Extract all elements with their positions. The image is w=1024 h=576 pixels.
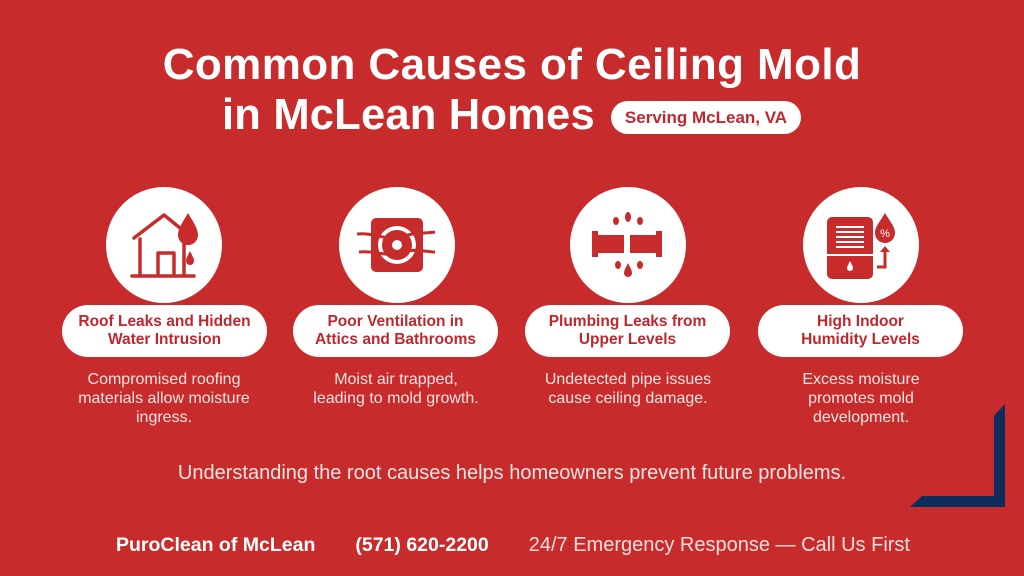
icon: house with water drop (106, 187, 222, 303)
label: plumbing leaks: Upper Levels (579, 331, 676, 348)
title line 2: in McLean Homes (222, 91, 595, 139)
text: plumbing desc (545, 371, 711, 407)
icon: burst pipe (570, 187, 686, 303)
label: roof leaks (62, 305, 267, 357)
label: humidity: High Indoor (817, 313, 904, 330)
label: roof leaks: Roof Leaks and Hidden (78, 313, 251, 330)
label: poor ventilation: Attics and Bathrooms (315, 331, 476, 348)
text: ventilation desc: leading to mold growth. (313, 390, 479, 407)
text: ventilation desc (313, 371, 479, 407)
label: humidity: Humidity Levels (801, 331, 920, 348)
text: humidity desc: promotes mold (808, 390, 914, 407)
text: humidity desc (802, 371, 920, 426)
text: roof desc: Compromised roofing (88, 371, 240, 388)
icon: ventilation fan (339, 187, 455, 303)
label: plumbing leaks (525, 305, 730, 357)
footer: PuroClean of McLean (571) 620-2200 24/7 Emergency Response — Call Us First (116, 534, 910, 556)
icon: dehumidifier: % (880, 228, 890, 240)
icon: dehumidifier (803, 187, 919, 303)
label: plumbing leaks: Plumbing Leaks from (549, 313, 706, 330)
title line 1: Common Causes of Ceiling Mold (163, 40, 861, 89)
text: humidity desc: Excess moisture (802, 371, 920, 388)
text: plumbing desc: cause ceiling damage. (548, 390, 708, 407)
text: humidity desc: development. (813, 409, 909, 426)
text: plumbing desc: Undetected pipe issues (545, 371, 711, 388)
text: roof desc: ingress. (136, 409, 192, 426)
text: ventilation desc: Moist air trapped, (334, 371, 458, 388)
label: humidity (758, 305, 963, 357)
summary sentence: Understanding the root causes helps homeowners prevent future problems. (178, 462, 846, 484)
label: poor ventilation: Poor Ventilation in (327, 313, 464, 330)
badge: Serving McLean, VA: Serving McLean, VA (625, 108, 787, 127)
label: poor ventilation (293, 305, 498, 357)
text: roof desc (78, 371, 250, 426)
label: roof leaks: Water Intrusion (108, 331, 221, 348)
text: roof desc: materials allow moisture (78, 390, 250, 407)
badge: Serving McLean, VA (611, 101, 801, 134)
